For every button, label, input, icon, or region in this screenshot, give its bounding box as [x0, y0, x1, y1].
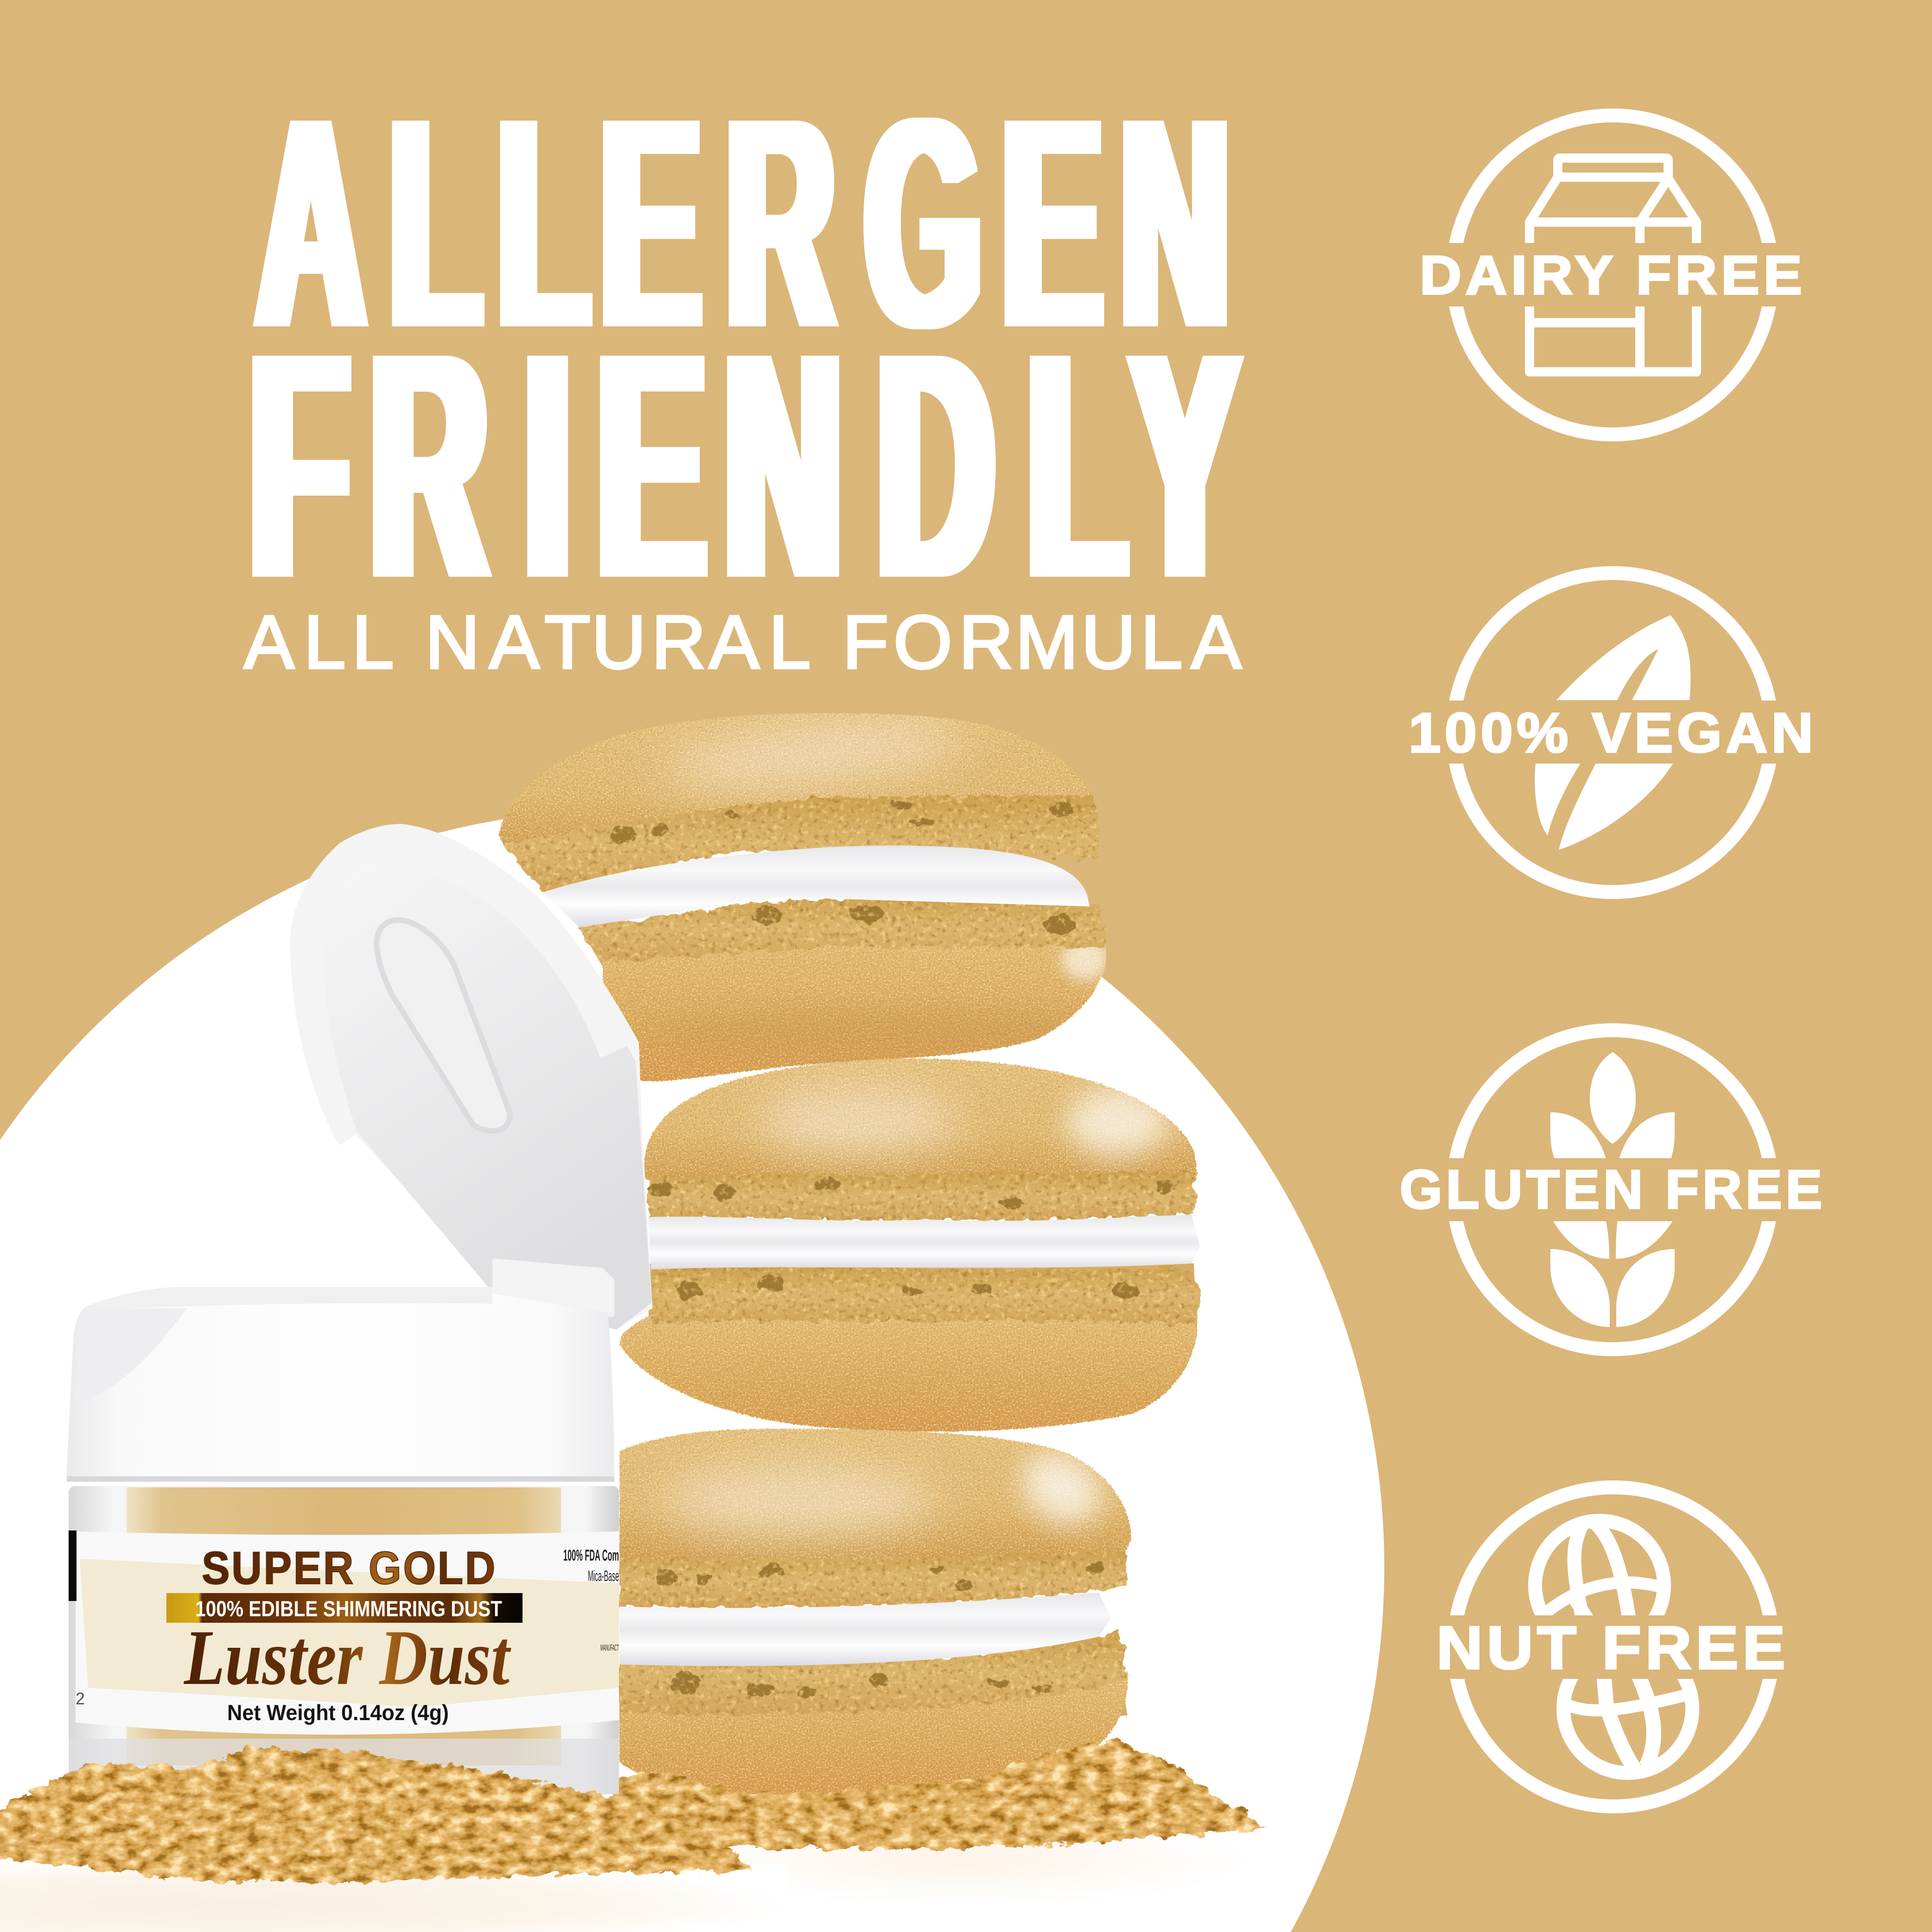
net weight: Net Weight 0.14oz (4g) — [227, 1700, 449, 1725]
jar — [67, 1258, 619, 1794]
jar cap — [67, 1258, 614, 1482]
macaron: middle — [619, 1058, 1200, 1432]
badge: 100% vegan — [1391, 573, 1836, 892]
subtitle: all natural formula: ALL — [244, 599, 392, 684]
title: allergen friendly — [250, 56, 1238, 645]
badge: nut free — [1391, 1487, 1836, 1806]
label brush stroke — [80, 1559, 619, 1707]
text: MANUFACT — [600, 1643, 619, 1652]
macaron: top — [499, 712, 1113, 1081]
icon: milk carton in ring — [1453, 115, 1772, 434]
gold bar — [166, 1593, 523, 1623]
powder pile: right — [612, 1738, 1264, 1850]
icon: wheat in ring — [1453, 1030, 1772, 1349]
label: gluten free: GLUTEN FREE — [1400, 1159, 1826, 1220]
icon: leaf in ring — [1453, 573, 1772, 892]
title line: ALLERGEN: ALLERGEN — [257, 56, 1229, 390]
label side text: 2 — [76, 1689, 85, 1708]
macaron: bottom — [619, 1429, 1131, 1795]
jar glass — [69, 1486, 619, 1794]
white circle backdrop — [0, 809, 1384, 1932]
jar powder contents — [127, 1487, 561, 1766]
lid teardrop tab — [377, 920, 510, 1131]
black side mark — [69, 1530, 77, 1601]
badge: gluten free — [1391, 1030, 1836, 1349]
macaron stack — [499, 712, 1200, 1795]
flip-top lid — [290, 824, 652, 1330]
label side text — [76, 1547, 619, 1708]
lid inner panel — [324, 864, 651, 1330]
icon: globe-shaped nut in ring — [1454, 1487, 1773, 1806]
bar text: 100% EDIBLE SHIMMERING DUST — [195, 1596, 502, 1621]
label: 100% vegan: 100% VEGAN — [1409, 701, 1817, 764]
jar label — [69, 1530, 619, 1734]
surface reflection under powder — [0, 1836, 1252, 1932]
subtitle: all natural formula: FORMULA — [842, 599, 1242, 684]
label: nut free: NUT FREE — [1436, 1613, 1789, 1682]
label: dairy free: DAIRY FREE — [1420, 245, 1806, 306]
product name: super gold: SUPER GOLD — [202, 1542, 497, 1594]
powder pile: left — [0, 1748, 758, 1882]
title line: FRIENDLY: FRIENDLY — [250, 287, 1238, 645]
text: Mica-Base — [588, 1568, 619, 1584]
script: luster dust: Luster Dust — [183, 1614, 511, 1701]
badge: dairy free — [1391, 115, 1836, 434]
subtitle: all natural formula: NATURAL — [425, 599, 809, 684]
lid outer rim — [290, 824, 652, 1330]
text: 100% FDA Com — [563, 1547, 619, 1564]
